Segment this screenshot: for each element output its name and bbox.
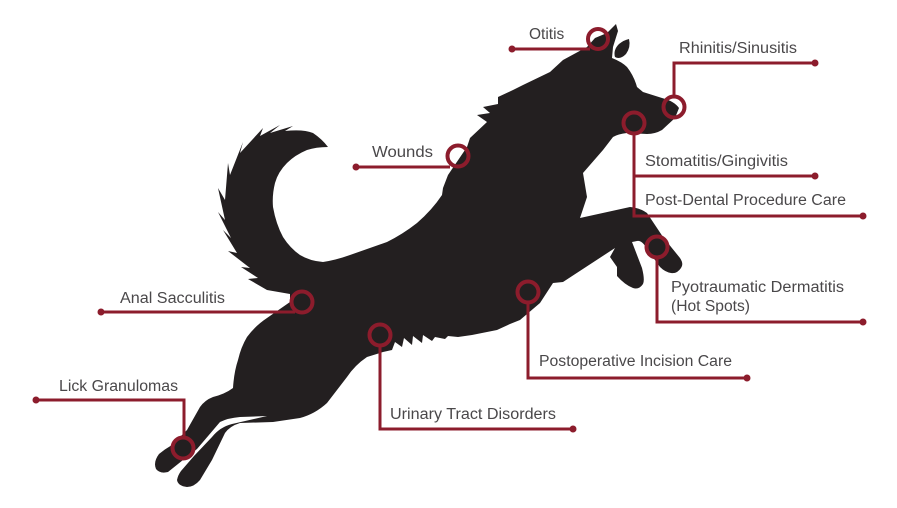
callout: Pyotraumatic Dermatitis: Pyotraumatic Dermatitis bbox=[671, 279, 844, 296]
callout: Urinary Tract Disorders: Urinary Tract Disorders bbox=[390, 406, 556, 423]
callout: Pyotraumatic Dermatitis: (Hot Spots) bbox=[671, 298, 750, 315]
callout: Pyotraumatic Dermatitis bbox=[646, 236, 866, 326]
callout: Stomatitis/Gingivitis and Post-Dental Procedure Care: Post-Dental Procedure Care bbox=[645, 192, 846, 209]
callout: Wounds: Wounds bbox=[372, 144, 433, 161]
callout: Anal Sacculitis: Anal Sacculitis bbox=[120, 290, 225, 307]
callout: Urinary Tract Disorders bbox=[370, 324, 576, 432]
callout: Postoperative Incision Care bbox=[518, 282, 750, 382]
callout: Stomatitis/Gingivitis and Post-Dental Procedure Care: Stomatitis/Gingivitis bbox=[645, 153, 788, 170]
callout: Lick Granulomas bbox=[32, 378, 194, 458]
dog silhouette bbox=[155, 24, 682, 487]
callout: Otitis bbox=[508, 26, 608, 52]
callout: Lick Granulomas: Lick Granulomas bbox=[59, 378, 178, 395]
callout: Otitis: Otitis bbox=[529, 26, 565, 43]
callout: Stomatitis/Gingivitis and Post-Dental Procedure Care bbox=[624, 112, 866, 220]
callout: Anal Sacculitis bbox=[98, 290, 312, 316]
callout: Rhinitis/Sinusitis bbox=[664, 40, 818, 118]
callout: Wounds bbox=[352, 144, 468, 170]
callout: Rhinitis/Sinusitis: Rhinitis/Sinusitis bbox=[679, 40, 797, 57]
callout: Postoperative Incision Care: Postoperative Incision Care bbox=[539, 353, 732, 370]
